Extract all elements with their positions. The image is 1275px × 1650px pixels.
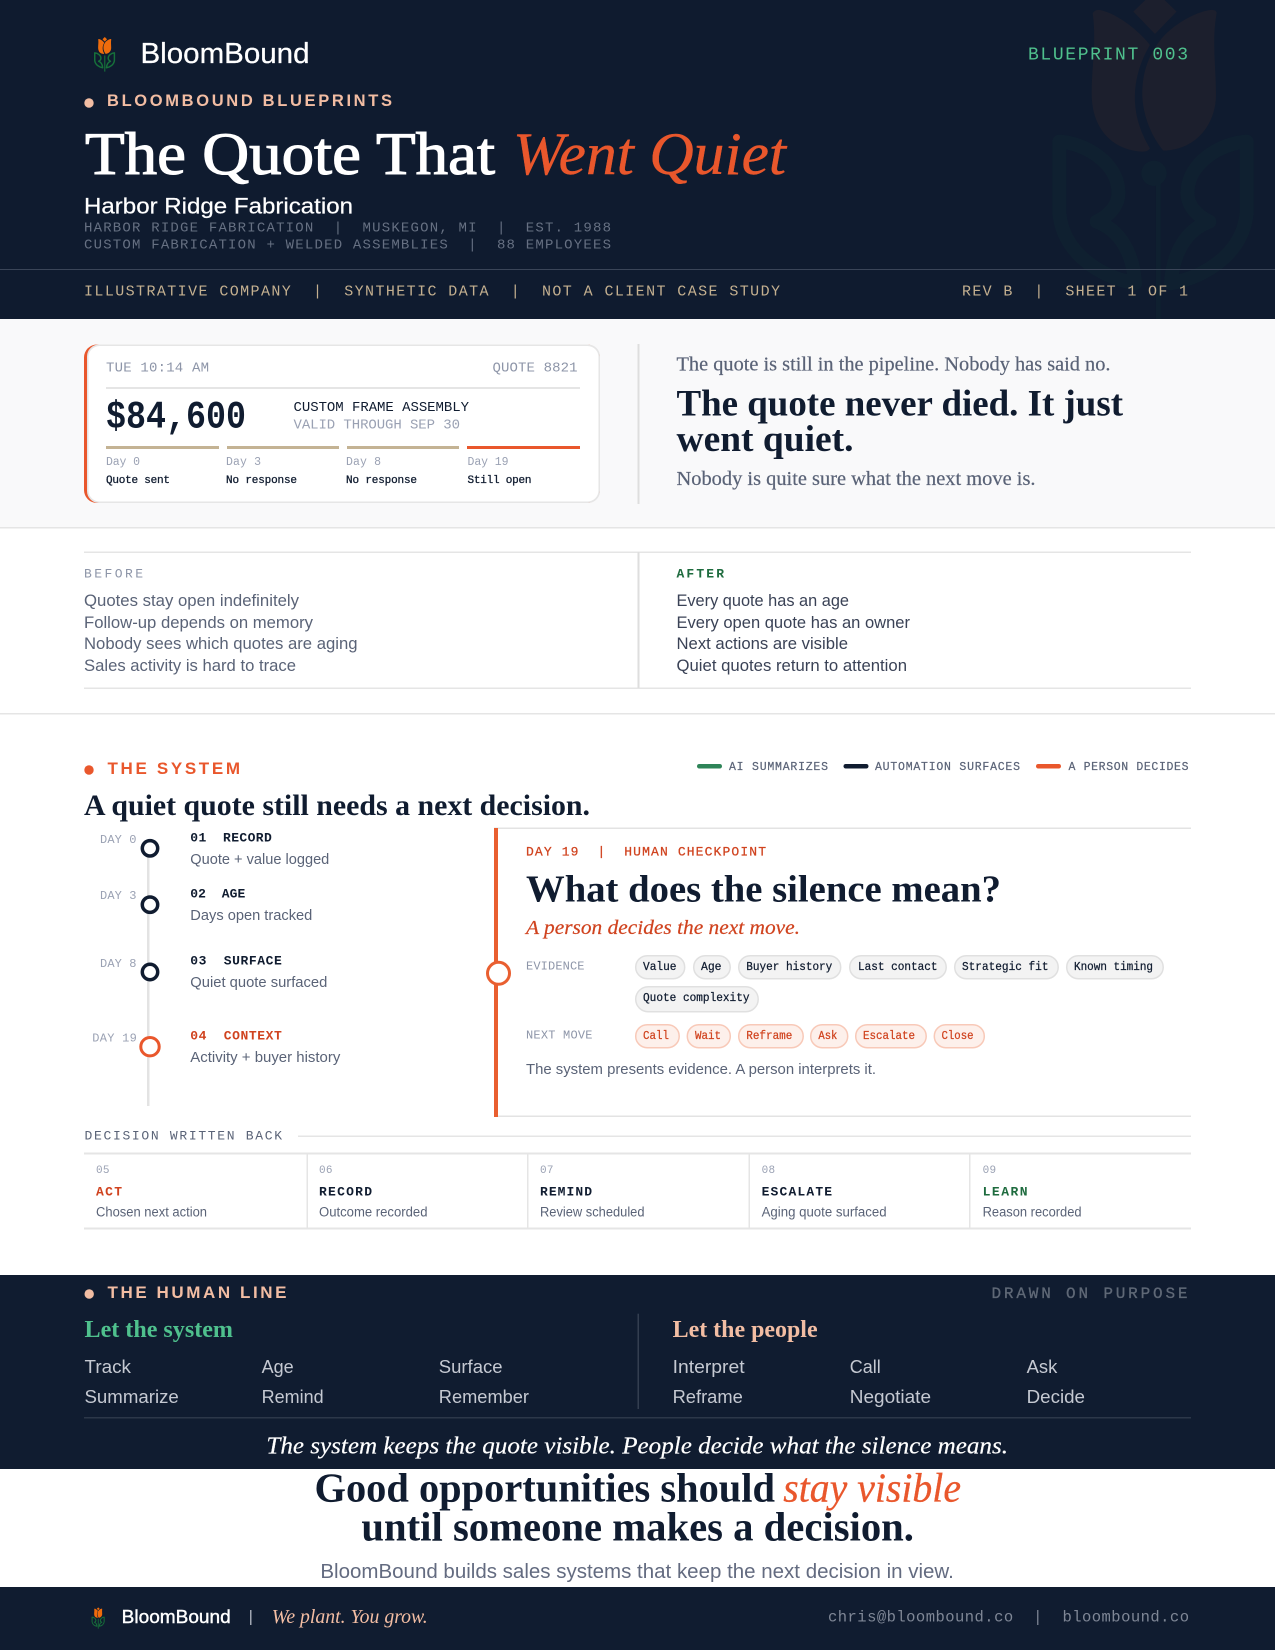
title <box>85 121 787 187</box>
company name: Harbor Ridge Fabrication <box>84 194 353 218</box>
footer contact: chris@bloombound.co | bloombound.co <box>828 1608 1189 1626</box>
panel: header <box>0 0 1275 319</box>
column: let the people: Let the people <box>673 1317 818 1343</box>
disclaimer bar: REV B | SHEET 1 OF 1 <box>962 284 1188 300</box>
step 05 act: 05 <box>96 1165 110 1177</box>
quote card <box>84 344 600 503</box>
step 02 age: 02 AGE <box>190 886 245 902</box>
closing statement <box>314 1464 961 1583</box>
step 07 remind: REMIND <box>540 1184 592 1200</box>
legend: A PERSON DECIDES <box>1068 761 1189 774</box>
narrative text <box>676 354 1124 490</box>
quote description: VALID THROUGH SEP 30 <box>294 418 460 434</box>
decision written back <box>84 1128 1191 1230</box>
step 02 age <box>100 886 312 924</box>
watermark tulip <box>1059 0 1247 319</box>
column: let the system <box>84 1317 529 1407</box>
next move tags: Reframe <box>746 1029 792 1043</box>
quote timeline: Day 19 <box>468 456 509 469</box>
step 07 remind <box>540 1165 644 1220</box>
quote timeline: No response <box>346 475 417 487</box>
column: let the people: Decide <box>1027 1386 1085 1407</box>
legend: AI SUMMARIZES <box>729 761 828 774</box>
quote timeline: Day 0 <box>106 456 140 469</box>
title: Went Quiet <box>513 121 787 187</box>
eyebrow: BloomBound Blueprints: BLOOMBOUND BLUEPRINTS <box>107 92 392 110</box>
step 04 context: 04 CONTEXT <box>190 1028 282 1044</box>
before column <box>84 566 358 675</box>
column: let the system: Track <box>84 1356 132 1377</box>
column: let the system: Surface <box>439 1356 502 1377</box>
card header <box>106 360 580 389</box>
column: let the system: Remember <box>439 1386 529 1407</box>
step 04 context: DAY 19 <box>92 1032 137 1046</box>
after column <box>676 566 910 675</box>
next move tags: Ask <box>818 1029 837 1043</box>
evidence tags: Strategic fit <box>962 960 1048 974</box>
evidence tags: Buyer history <box>746 960 832 974</box>
next move tags: Call <box>643 1029 669 1043</box>
step 08 escalate: Aging quote surfaced <box>762 1205 887 1220</box>
narrative text: Nobody is quite sure what the next move is. <box>676 469 1036 490</box>
panel: the human line <box>0 1275 1275 1469</box>
evidence tags: Quote complexity <box>643 991 750 1005</box>
step 04 context: Activity + buyer history <box>190 1050 341 1066</box>
column: let the system: Remind <box>262 1386 324 1407</box>
quote timeline <box>106 446 580 487</box>
step 07 remind: Review scheduled <box>540 1205 644 1220</box>
checkpoint note: The system presents evidence. A person interprets it. <box>526 1062 876 1078</box>
section heading: A quiet quote still needs a next decision. <box>84 789 590 822</box>
after column: AFTER <box>676 566 724 582</box>
section eyebrow: THE HUMAN LINE <box>108 1283 286 1302</box>
quote timeline: Day 3 <box>226 456 261 469</box>
legend <box>697 761 1189 774</box>
icon: footer tulip logo <box>92 1607 104 1629</box>
drawn on purpose label: DRAWN ON PURPOSE <box>992 1285 1188 1303</box>
evidence tags: Known timing <box>1074 960 1153 974</box>
next move tags: NEXT MOVE <box>526 1028 592 1042</box>
step 04 context <box>92 1028 341 1066</box>
column: let the people: Reframe <box>673 1386 743 1407</box>
column: let the system: Let the system <box>84 1317 233 1343</box>
before column: Sales activity is hard to trace <box>84 657 296 675</box>
step 08 escalate: 08 <box>762 1165 775 1177</box>
quote description <box>294 400 470 434</box>
evidence tags: Age <box>701 960 722 974</box>
panel: human checkpoint <box>488 828 1191 1117</box>
quote timeline: Quote sent <box>106 475 170 487</box>
footer brand: BloomBound <box>122 1607 231 1627</box>
step 05 act: ACT <box>96 1184 122 1200</box>
step 06 record: 06 <box>319 1165 332 1177</box>
next move tags: Wait <box>695 1029 721 1043</box>
panel: before and after <box>84 552 1191 689</box>
step 08 escalate: ESCALATE <box>762 1184 832 1200</box>
step 03 surface <box>100 954 327 991</box>
before column: BEFORE <box>84 566 143 582</box>
closing statement: stay visible <box>783 1464 961 1510</box>
step 09 learn: Reason recorded <box>983 1205 1082 1220</box>
checkpoint heading: What does the silence mean? <box>526 868 1001 910</box>
before column: Follow-up depends on memory <box>84 614 314 632</box>
step 09 learn: 09 <box>983 1165 996 1177</box>
footer <box>0 1587 1275 1650</box>
title: The Quote That <box>85 121 495 187</box>
step 08 escalate <box>762 1165 887 1220</box>
quote description: CUSTOM FRAME ASSEMBLY <box>294 400 470 416</box>
closing statement: Good opportunities should <box>314 1464 775 1510</box>
evidence tags <box>526 956 1163 1012</box>
vertical timeline <box>92 830 341 1106</box>
step 02 age: Days open tracked <box>190 908 312 924</box>
column: let the system: Summarize <box>84 1386 179 1407</box>
step 06 record: RECORD <box>319 1184 372 1200</box>
icon: BloomBound tulip logo <box>95 37 114 72</box>
after column: Quiet quotes return to attention <box>676 657 907 675</box>
card header: QUOTE 8821 <box>492 360 578 376</box>
decision written back: DECISION WRITTEN BACK <box>84 1128 282 1144</box>
human line statement: The system keeps the quote visible. People decide what the silence means. <box>266 1432 1008 1459</box>
footer tagline: We plant. You grow. <box>272 1606 428 1628</box>
step 01 record: 01 RECORD <box>190 830 272 846</box>
card header: TUE 10:14 AM <box>106 360 209 376</box>
quote value: $84,600 <box>106 396 246 440</box>
after column: Every quote has an age <box>676 592 849 610</box>
next move tags: Escalate <box>863 1029 915 1043</box>
column: let the people: Negotiate <box>850 1386 931 1407</box>
column: let the people: Interpret <box>673 1356 745 1377</box>
checkpoint subheading: A person decides the next move. <box>524 917 800 939</box>
logo wordmark: BloomBound <box>140 38 310 70</box>
narrative text: The quote never died. It just <box>676 384 1124 424</box>
company details: HARBOR RIDGE FABRICATION | MUSKEGON, MI | EST. 1988 <box>84 220 611 236</box>
disclaimer bar: ILLUSTRATIVE COMPANY | SYNTHETIC DATA | NOT A CLIENT CASE STUDY <box>84 284 780 300</box>
disclaimer bar <box>84 284 1188 300</box>
closing statement: until someone makes a decision. <box>361 1504 914 1550</box>
before column: Quotes stay open indefinitely <box>84 592 300 610</box>
quote timeline: Day 8 <box>346 456 381 469</box>
evidence tags: Last contact <box>858 960 938 974</box>
next move tags <box>526 1025 984 1048</box>
step 02 age: DAY 3 <box>100 889 136 903</box>
step 03 surface: 03 SURFACE <box>190 954 282 968</box>
company details: CUSTOM FABRICATION + WELDED ASSEMBLIES | 88 EMPLOYEES <box>84 238 611 254</box>
step 03 surface: Quiet quote surfaced <box>190 975 327 991</box>
narrative text: The quote is still in the pipeline. Nobody has said no. <box>676 354 1110 376</box>
step 05 act <box>96 1165 207 1220</box>
next move tags: Close <box>942 1029 974 1043</box>
step 01 record: Quote + value logged <box>190 852 329 868</box>
quote timeline: No response <box>226 475 297 487</box>
legend: AUTOMATION SURFACES <box>875 761 1020 774</box>
column: let the people: Call <box>850 1356 881 1377</box>
panel: quote situation <box>0 319 1275 528</box>
after column: Next actions are visible <box>676 635 848 653</box>
step 09 learn <box>983 1165 1082 1220</box>
narrative text: went quiet. <box>676 419 854 460</box>
closing statement: BloomBound builds sales systems that keep the next decision in view. <box>320 1561 954 1583</box>
column: let the people <box>673 1317 1085 1407</box>
step 05 act: Chosen next action <box>96 1205 207 1220</box>
before column: Nobody sees which quotes are aging <box>84 635 358 653</box>
step 06 record: Outcome recorded <box>319 1205 428 1220</box>
step 01 record <box>100 830 329 868</box>
column: let the people: Ask <box>1027 1356 1058 1377</box>
step 09 learn: LEARN <box>983 1184 1028 1200</box>
panel: the system <box>84 759 1191 1230</box>
quote timeline: Still open <box>468 475 532 487</box>
step 07 remind: 07 <box>540 1165 554 1177</box>
evidence tags: Value <box>643 960 676 974</box>
evidence tags: EVIDENCE <box>526 960 584 974</box>
blueprint number: BLUEPRINT 003 <box>1028 46 1188 66</box>
column: let the system: Age <box>262 1356 294 1377</box>
checkpoint label: DAY 19 | HUMAN CHECKPOINT <box>526 844 766 860</box>
step 01 record: DAY 0 <box>100 833 136 847</box>
after column: Every open quote has an owner <box>676 614 910 632</box>
step 06 record <box>319 1165 428 1220</box>
company details <box>84 220 611 254</box>
step 03 surface: DAY 8 <box>100 957 136 971</box>
section eyebrow: THE SYSTEM <box>108 759 240 778</box>
